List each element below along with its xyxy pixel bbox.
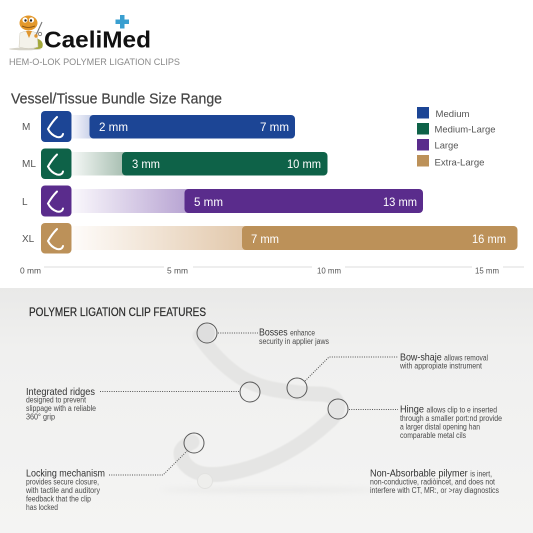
row: Medium (22, 111, 295, 142)
axis: millimetre scale: 5 mm (167, 266, 188, 276)
callout: bosses: security in applier jaws (259, 337, 329, 346)
callout: bow-shape: Bow-shaje allows removal (400, 352, 488, 364)
chart heading: Vessel/Tissue Bundle Size Range (11, 92, 222, 108)
callout: locking mechanism: with tactile and auditory (25, 486, 100, 495)
callout: integrated ridges (26, 382, 260, 422)
callout: integrated ridges: slippage with a reliable (26, 404, 96, 413)
callout: integrated ridges: 360° grip (26, 412, 56, 422)
callout: locking mechanism: has locked (26, 503, 58, 512)
callout: hinge: a larger distal opening han (400, 422, 480, 432)
callout: hinge: through a smaller port:nd provide (400, 414, 502, 423)
axis: millimetre scale: 0 mm (20, 266, 41, 276)
callout: bow-shape: with appropiate instrument (399, 362, 483, 370)
callout: locking mechanism: feedback that the clip (26, 494, 92, 504)
axis: millimetre scale (20, 266, 524, 276)
panel: clip features (0, 288, 533, 533)
subtitle: HEM-O-LOK POLYMER LIGATION CLIPS (9, 57, 180, 68)
callout: integrated ridges: Integrated ridges (26, 386, 95, 398)
callout: hinge (328, 399, 502, 440)
logo: CaeliMed (9, 15, 151, 52)
row: Medium: 2 mm (99, 122, 128, 134)
axis: millimetre scale: 15 mm (475, 266, 499, 276)
icon: blue plus (116, 15, 129, 28)
row: Extra-Large: 7 mm (251, 234, 279, 246)
heading: features: POLYMER LIGATION CLIP FEATURES (29, 307, 206, 319)
text block: non-absorbable polymer: Non-Absorbable pilymer is inert, (370, 468, 492, 480)
axis: millimetre scale: 10 mm (317, 266, 341, 276)
illustration: polymer clip (160, 324, 380, 492)
row: Medium: M (22, 122, 30, 133)
row: Large: L (22, 197, 28, 208)
callout: locking mechanism: Locking mechanism (26, 468, 105, 480)
row: Large: 5 mm (194, 197, 223, 209)
callout: locking mechanism (25, 433, 204, 512)
row: Medium-Large: 10 mm (287, 159, 321, 171)
legend: Extra-Large (434, 158, 484, 168)
text block: non-absorbable polymer: non-conductive, radiòincet, and does not (370, 478, 496, 486)
row: Medium-Large: 3 mm (132, 159, 160, 171)
legend: Large (434, 140, 458, 152)
legend (417, 107, 496, 168)
icon: lizard mascot in lab coat (9, 16, 43, 50)
row: Large: 13 mm (383, 197, 417, 209)
wordmark: CaeliMed (44, 26, 151, 52)
row: Medium: 7 mm (260, 122, 289, 134)
callout: integrated ridges: designed to prevent (26, 396, 87, 404)
bar chart: size ranges (22, 111, 518, 254)
callout: bow-shape (287, 352, 488, 398)
callout: bosses (197, 323, 329, 346)
row: Medium-Large: ML (22, 159, 36, 170)
callout: locking mechanism: provides secure closure, (26, 478, 99, 486)
row: Extra-Large (22, 223, 518, 254)
text block: non-absorbable polymer (370, 468, 499, 495)
callout: hinge: Hinge allows clip to e inserted (400, 404, 497, 416)
row: Large (22, 186, 423, 216)
row: Extra-Large: XL (22, 234, 35, 245)
legend: Medium (436, 109, 470, 120)
callout: bosses: Bosses enhance (259, 326, 315, 338)
row: Medium-Large (22, 148, 328, 179)
text block: non-absorbable polymer: interfere with CT, MR:, or >ray diagnostics (370, 486, 499, 495)
legend: Medium-Large (434, 124, 496, 136)
callout: hinge: comparable metal cils (400, 431, 466, 440)
row: Extra-Large: 16 mm (472, 234, 506, 246)
